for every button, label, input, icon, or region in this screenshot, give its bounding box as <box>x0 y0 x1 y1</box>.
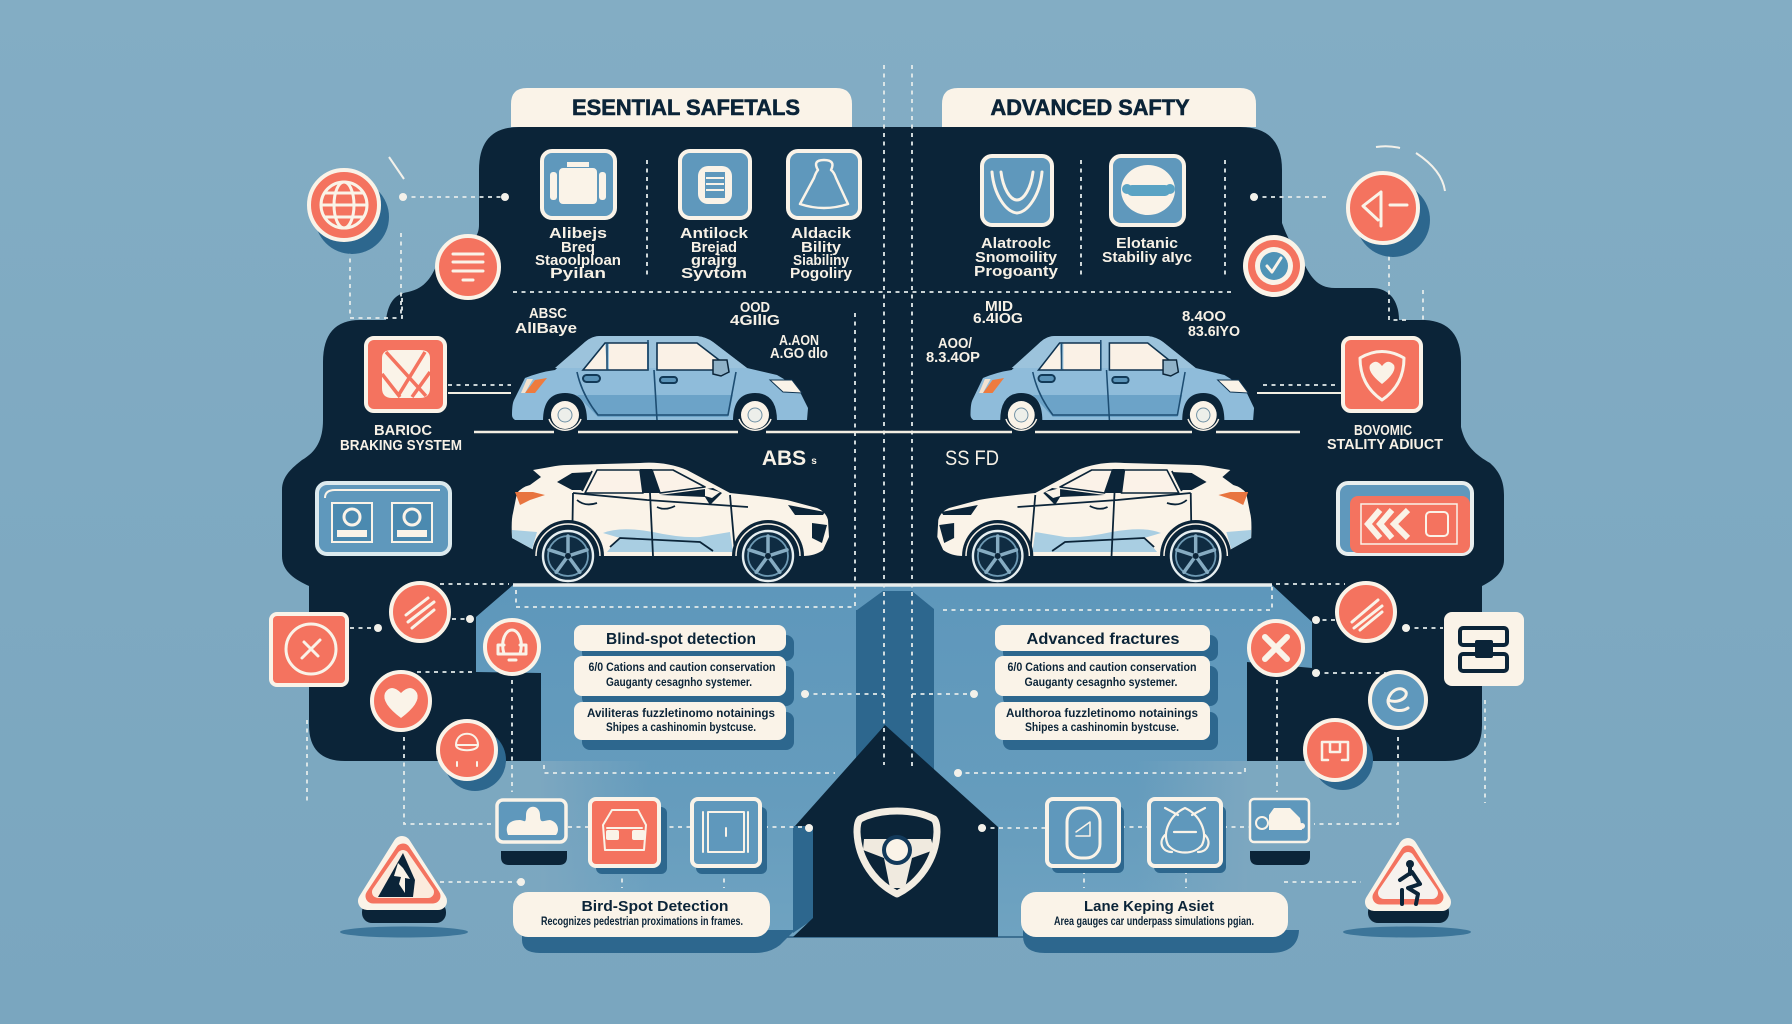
feature cards left: 6/0 Cations and caution conservation <box>588 660 776 674</box>
warning triangle left <box>340 845 468 938</box>
feature cards right: 6/0 Cations and caution conservation <box>1008 660 1196 674</box>
label: electronic stability: Elotanic <box>1116 236 1178 252</box>
label: electronic stability <box>1102 236 1192 266</box>
feature cards left: Aviliteras fuzzletinomo notainings <box>587 706 775 720</box>
label: stability adjust: BOVOMIC <box>1354 423 1412 439</box>
feature cards right: Advanced fractures <box>1026 631 1180 648</box>
circle badge: person <box>485 620 539 674</box>
feature cards left: Blind-spot detection <box>606 631 756 648</box>
coral wide icon: chevrons <box>1338 483 1472 554</box>
label: anti-lock brake: Brejad <box>691 240 737 256</box>
small icons row left <box>497 799 767 874</box>
cross circle badge <box>1249 621 1303 675</box>
callouts right sedan: 8.3.4OP <box>926 350 980 366</box>
label: electronic stability program: Progoanty <box>974 264 1058 280</box>
callout: blind spot <box>513 892 795 953</box>
callout: blind spot: Recognizes pedestrian proximations in frames. <box>541 914 743 928</box>
warning triangle right <box>1343 847 1471 938</box>
label: airbag: Pyilan <box>550 266 606 282</box>
callouts right sedan: 83.6IYO <box>1188 324 1240 340</box>
label: stability: Siabiliny <box>793 253 849 269</box>
label: airbag: Alibejs <box>549 226 607 242</box>
label: braking system <box>340 423 462 454</box>
circle badge: heart <box>372 672 430 730</box>
label: electronic stability program: Alatroolc <box>981 236 1051 252</box>
steering wheel shield <box>857 811 937 894</box>
label: electronic stability program <box>974 236 1058 280</box>
callout: lane keeping: Lane Keping Asiet <box>1084 898 1214 915</box>
coral icon: shield heart <box>1343 338 1421 411</box>
callouts left sedan: AlIBaye <box>515 321 577 337</box>
header tab: advanced safety: ADVANCED SAFTY <box>990 95 1190 120</box>
label: electronic stability: Stabiliy aIyc <box>1102 250 1192 266</box>
sedan car left <box>512 336 808 430</box>
label: braking system: BARIOC <box>374 423 433 439</box>
lower blue features panel <box>476 585 1312 937</box>
dashed connector lines <box>307 65 1485 888</box>
sedan car right <box>970 336 1254 430</box>
coral icon: braking <box>366 338 445 411</box>
coral square badge <box>271 614 347 685</box>
icon tile: electronic U <box>982 156 1052 225</box>
icon tile: stability weight <box>788 151 860 218</box>
callouts left sedan: ABSC <box>529 306 567 322</box>
circle badge: car front <box>438 721 506 791</box>
label: airbag <box>535 226 621 282</box>
globe-right arrow circle badge <box>1348 173 1430 257</box>
label: stability adjust <box>1327 423 1443 453</box>
cream square badge: seat belt <box>1444 612 1524 686</box>
header tab: essential safety: ESENTIAL SAFETALS <box>572 95 800 120</box>
label: stability: Pogoliry <box>790 266 852 282</box>
centre column and steering house <box>793 591 998 937</box>
globe circle badge <box>309 170 389 254</box>
label: anti-lock brake: grajrg <box>691 253 737 269</box>
small icons row right <box>1047 799 1310 873</box>
feature cards right: Aulthoroa fuzzletinomo notainings <box>1006 706 1198 720</box>
blue circle badge: e mark <box>1370 672 1426 728</box>
circle: brake pad <box>391 583 449 641</box>
label: electronic stability program: Snomoility <box>975 250 1057 266</box>
feature cards left: Shipes a cashinomin bystcuse. <box>606 720 756 734</box>
label: stability <box>790 226 852 282</box>
callouts left sedan: OOD <box>740 300 770 316</box>
icon tile: anti-lock brake <box>680 151 750 218</box>
callouts right sedan: AOO/ <box>938 336 972 352</box>
label: braking system: BRAKING SYSTEM <box>340 438 462 454</box>
feature cards right: Shipes a cashinomin bystcuse. <box>1025 720 1179 734</box>
text: ABS: ABS <box>762 447 806 470</box>
callouts left sedan: 4GIlIG <box>730 313 780 329</box>
callouts right sedan: 6.4IOG <box>973 311 1023 327</box>
header tab: essential safety <box>511 88 852 127</box>
feature cards right: Gauganty cesagnho systemer. <box>1024 675 1178 689</box>
dark central panel silhouette <box>282 127 1504 761</box>
callout: blind spot: Bird-Spot Detection <box>582 898 728 915</box>
label: anti-lock brake <box>680 226 749 282</box>
feature cards left <box>574 625 794 750</box>
blue wide icon: sensors <box>317 483 450 554</box>
check circle badge <box>1243 235 1305 297</box>
feature cards right <box>995 625 1218 750</box>
label: anti-lock brake: Antilock <box>680 226 749 242</box>
arc accent left <box>389 157 404 179</box>
label: airbag: Breq <box>561 240 595 256</box>
callout: lane keeping: Area gauges car underpass simulations pgian. <box>1054 914 1254 928</box>
circle badge: coral seat <box>1305 720 1373 790</box>
callouts right sedan: MID <box>985 299 1013 315</box>
text: SS FD: SS FD <box>945 447 999 470</box>
circle badge: brake pad right <box>1337 583 1395 641</box>
icon tile: stability oval <box>1111 156 1184 225</box>
road lines <box>474 431 1300 433</box>
callouts right sedan <box>926 299 1240 366</box>
menu circle badge <box>437 236 499 298</box>
header tab: advanced safety <box>942 88 1256 127</box>
arc accent right <box>1376 146 1445 191</box>
icon tile: airbag <box>542 151 615 218</box>
white divider line <box>513 583 1272 587</box>
callouts right sedan: 8.4OO <box>1182 309 1226 325</box>
label: airbag: Staoolploan <box>535 253 621 269</box>
text: ABS: s <box>811 456 817 467</box>
SUV car right <box>937 463 1251 581</box>
callouts left sedan: A.AON <box>779 333 819 349</box>
callouts left sedan: A.GO dlo <box>770 346 828 362</box>
callout: lane keeping <box>1021 892 1299 953</box>
SUV car left <box>512 463 829 581</box>
feature cards left: Gauganty cesagnho systemer. <box>606 675 752 689</box>
label: anti-lock brake: Syvtom <box>681 266 747 282</box>
label: stability: Aldacik <box>791 226 852 242</box>
label: stability: Bility <box>801 240 841 256</box>
callouts left sedan <box>515 300 828 362</box>
label: stability adjust: STALITY ADIUCT <box>1327 437 1443 453</box>
